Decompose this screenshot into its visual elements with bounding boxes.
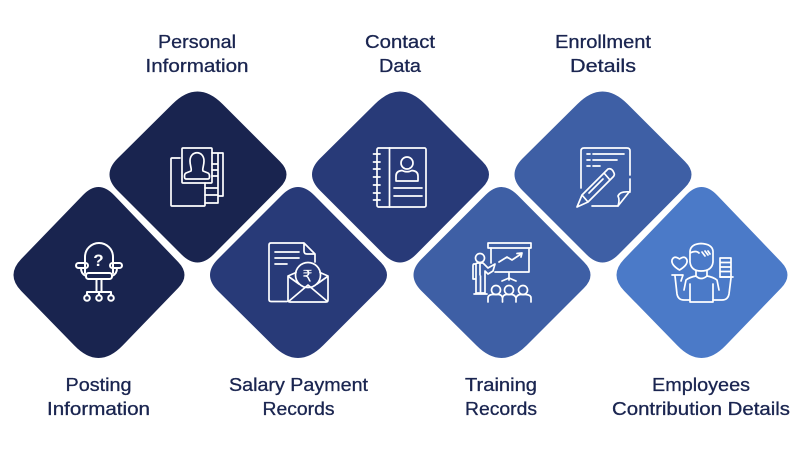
label: contact data: Data xyxy=(379,56,422,76)
icon: payslip with rupee envelope xyxy=(269,243,328,302)
icon: office chair with question mark xyxy=(76,243,122,301)
label: contact data xyxy=(365,32,435,76)
label: training records xyxy=(465,375,537,419)
icon: payslip with rupee envelope: ₹ xyxy=(302,266,313,286)
panel: posting information xyxy=(13,187,184,419)
icon: employee with heart and document xyxy=(672,244,733,302)
label: employees contribution details: Contribution Details xyxy=(612,399,790,419)
label: posting information: Information xyxy=(47,399,150,419)
panel: training records xyxy=(414,187,590,419)
label: personal information: Personal xyxy=(158,32,236,52)
label: salary payment records: Salary Payment xyxy=(229,375,368,395)
icon: contact address book xyxy=(374,148,426,207)
diamond: salary xyxy=(210,187,387,358)
label: salary payment records xyxy=(229,375,368,419)
label: personal information: Information xyxy=(146,56,248,76)
panel: employees contribution details xyxy=(612,187,790,419)
label: enrollment details: Details xyxy=(570,56,636,76)
diamond: posting xyxy=(13,187,184,358)
label: salary payment records: Records xyxy=(262,399,334,419)
diamond: enrollment xyxy=(514,92,692,262)
label: employees contribution details xyxy=(612,375,790,419)
label: posting information xyxy=(47,375,150,419)
diamond: training xyxy=(414,187,590,358)
icon: presenter with chart and audience xyxy=(473,243,531,302)
label: enrollment details xyxy=(555,32,651,76)
diamond: employees contribution xyxy=(616,187,787,358)
icon: office chair with question mark: ? xyxy=(93,251,104,270)
panel: enrollment details xyxy=(514,32,692,262)
icon: form with pencil xyxy=(577,148,630,207)
diamond: contact xyxy=(312,92,489,262)
panel: salary payment records xyxy=(210,187,387,419)
label: posting information: Posting xyxy=(66,375,132,395)
icon: personal file documents xyxy=(171,148,223,206)
label: contact data: Contact xyxy=(365,32,435,52)
label: employees contribution details: Employees xyxy=(652,375,750,395)
label: personal information xyxy=(146,32,248,76)
panel: contact data xyxy=(312,32,489,262)
diamond: personal xyxy=(110,92,286,262)
label: training records: Records xyxy=(465,399,537,419)
panel: personal information xyxy=(110,32,286,262)
label: enrollment details: Enrollment xyxy=(555,32,651,52)
label: training records: Training xyxy=(465,375,537,395)
